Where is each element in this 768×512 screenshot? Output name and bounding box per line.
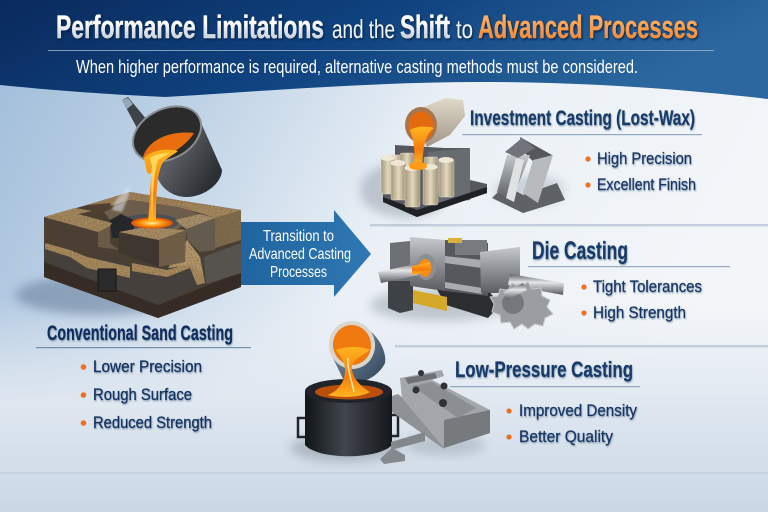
subtitle: When higher performance is required, alternative casting methods must be considered. [76,57,638,77]
sand layer [45,240,205,285]
bottom plate [44,262,241,318]
icon: low-pressure furnace and ladle [290,317,400,462]
panel: low-pressure casting text: Improved Density [519,401,637,420]
gear [490,282,553,329]
left rod [378,262,429,283]
panel: low-pressure casting text: Better Quality [519,427,613,446]
lower dark layer [44,243,241,305]
arrow: transition [241,210,371,297]
heading: Low-Pressure Casting [455,357,633,382]
panel: conventional sand casting text: Lower Precision [93,357,202,376]
inner cavity [104,200,205,233]
right rod [508,274,564,295]
heading: Die Casting [532,237,628,265]
panel: die casting text: Tight Tolerances [593,277,702,296]
panel: conventional sand casting text: Rough Surface [93,385,192,404]
icon: sand mold with ladle [15,95,241,318]
title: Shift [400,9,450,45]
panel: conventional sand casting text: Reduced Strength [93,413,212,432]
panel: low-pressure casting text [450,357,640,446]
bullets [585,156,591,188]
molten stream [144,150,178,222]
right block [480,247,520,293]
handles [298,418,305,437]
title: Performance Limitations [56,9,324,45]
icon: die casting machine [370,237,564,329]
ladle [122,95,222,197]
arrow label: Transition to [263,228,334,245]
heading: Conventional Sand Casting [47,322,233,345]
yellow box [413,290,447,311]
arrow label: Advanced Casting [249,246,351,263]
panel: die casting text [528,237,730,322]
front block [119,232,159,267]
smoke [112,184,130,212]
metal pool [131,218,173,228]
left block front [44,217,120,258]
arrow label [249,228,351,281]
centre [445,240,488,296]
ladle [330,325,385,384]
machine [383,145,487,217]
icon: investment casting [360,98,487,218]
molten stream [328,347,370,397]
title [56,9,698,45]
icon: low-pressure die unit [380,370,490,464]
pot [305,391,392,456]
bullets [506,408,512,440]
solid mass [44,192,241,318]
panel: investment casting text [462,107,702,194]
panel: die casting text: High Strength [593,303,686,322]
left frame [390,241,410,281]
icon: mold part [492,137,565,213]
base [436,288,500,318]
far right blocks [215,210,241,248]
title: to [456,14,473,44]
ladle [410,98,465,147]
left block top [44,208,112,232]
ceramic moulds [381,153,454,207]
gate [98,269,116,291]
panel: conventional sand casting text [36,322,251,432]
panel: investment casting text: Excellent Finish [597,175,696,194]
arrow label: Processes [270,264,327,281]
bullets [581,284,587,316]
bullets [81,364,86,426]
main block [410,237,445,291]
back wall top [87,192,241,216]
panel: investment casting text: High Precision [597,149,692,168]
header band [0,0,768,99]
stand [388,280,413,313]
title: and the [332,14,395,44]
